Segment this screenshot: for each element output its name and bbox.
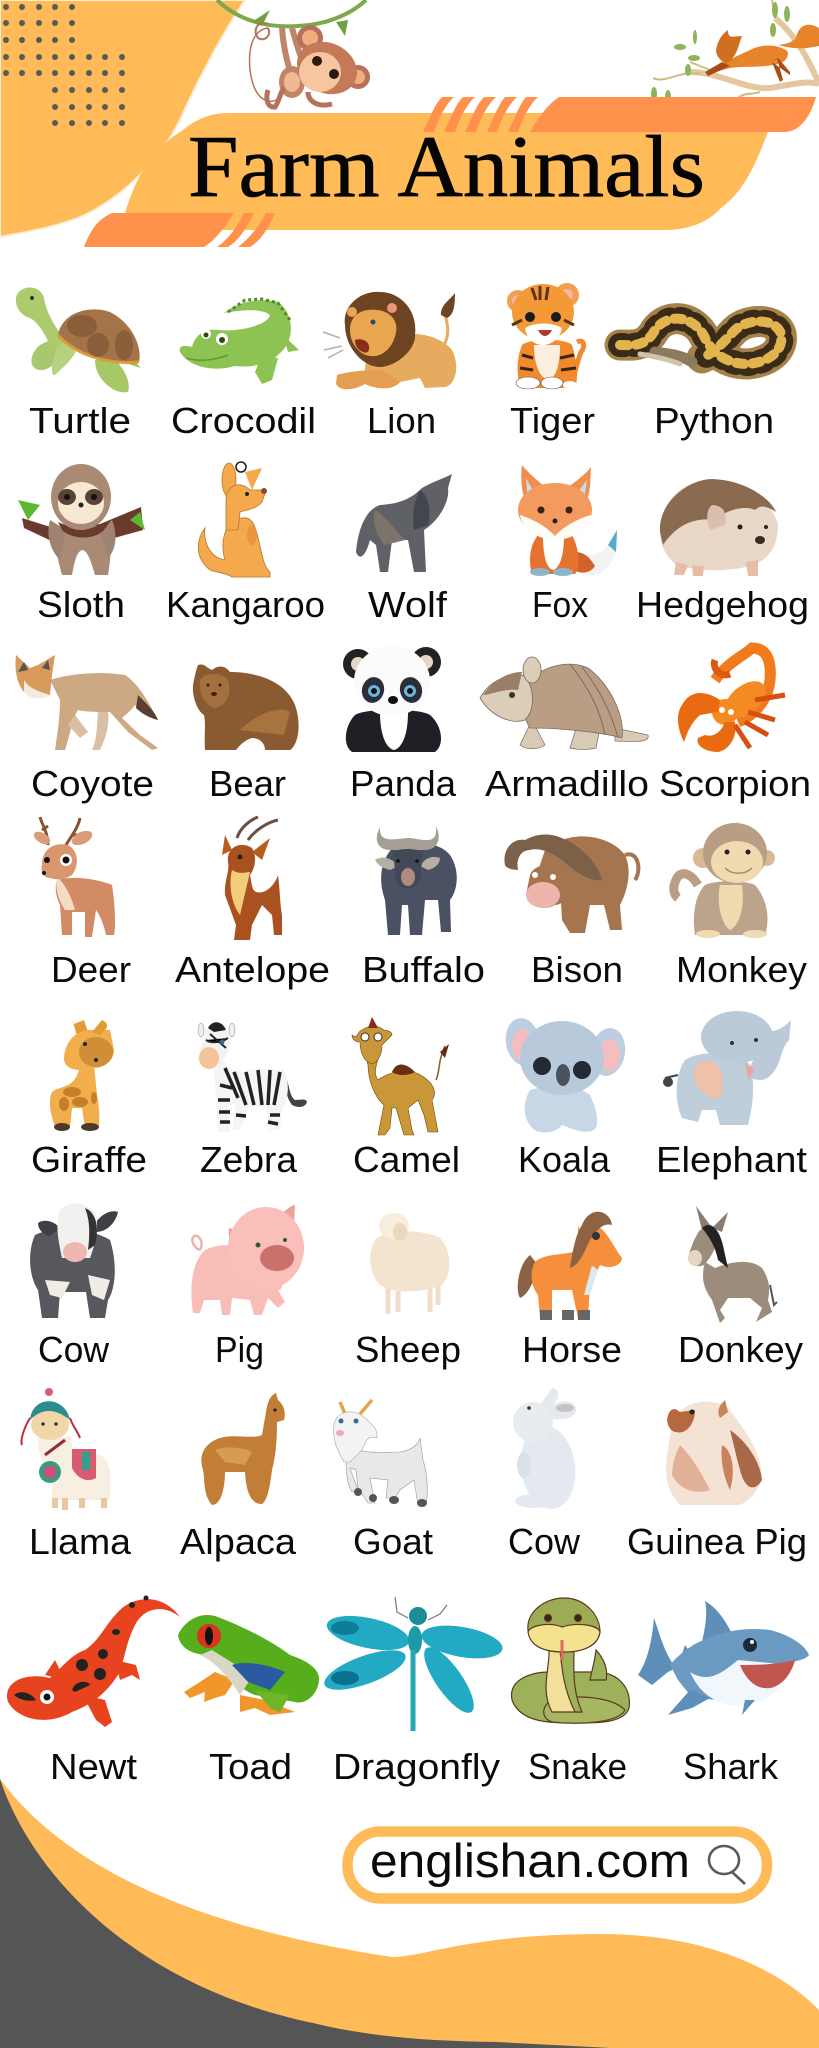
cell: sloth [18, 464, 145, 625]
label: Snake: Snake [528, 1746, 627, 1787]
icon: snake [512, 1598, 629, 1723]
label: Donkey: Donkey [678, 1329, 803, 1370]
label: Armadillo: Armadillo [485, 763, 649, 804]
label: Pig: Pig [215, 1329, 264, 1370]
icon: toad [178, 1615, 319, 1715]
icon: newt [7, 1596, 180, 1727]
cell: crocodile [171, 299, 316, 441]
icon: cow [30, 1203, 118, 1318]
cell: camel [352, 1017, 460, 1180]
label: Zebra: Zebra [200, 1139, 298, 1180]
label: Cow (second): Cow [508, 1521, 581, 1562]
website text: englishan.com [370, 1834, 690, 1887]
cell: antelope [175, 817, 330, 990]
cell: horse [518, 1212, 622, 1370]
cell: python [620, 319, 781, 441]
icon: wolf [356, 474, 452, 572]
icon: lion [323, 292, 456, 389]
label: Sheep: Sheep [355, 1329, 461, 1370]
icon: bison [504, 835, 638, 933]
label: Antelope: Antelope [175, 949, 330, 990]
label: Koala: Koala [518, 1139, 611, 1180]
label: Bear: Bear [209, 763, 286, 804]
cell: sheep [355, 1213, 461, 1370]
cell: fox [518, 465, 618, 625]
cell: alpaca [180, 1393, 297, 1562]
label: Monkey: Monkey [676, 949, 807, 990]
label: Scorpion: Scorpion [659, 763, 811, 804]
label: Buffalo: Buffalo [362, 949, 485, 990]
icon: tiger [507, 283, 584, 389]
label: Alpaca: Alpaca [180, 1521, 297, 1562]
footer wave: dark grey [0, 1779, 611, 2048]
cell: elephant [656, 1011, 807, 1180]
icon: rabbit [513, 1388, 581, 1512]
icon: hedgehog [660, 479, 778, 576]
cell: coyote [15, 655, 158, 804]
cell: guinea pig [627, 1400, 807, 1562]
label: Guinea Pig: Guinea Pig [627, 1521, 807, 1562]
label: Tiger: Tiger [510, 400, 595, 441]
icon: pig [191, 1205, 304, 1315]
cell: wolf [356, 474, 452, 625]
monkey hanging from vine [217, 0, 370, 107]
label: Panda: Panda [350, 763, 457, 804]
label: Fox: Fox [532, 584, 588, 625]
cell: bison [504, 835, 638, 990]
label: Goat: Goat [353, 1521, 433, 1562]
label: Crocodil: Crocodil [171, 400, 316, 441]
label: Lion: Lion [367, 400, 436, 441]
cell: snake [512, 1598, 629, 1787]
label: Hedgehog: Hedgehog [636, 584, 809, 625]
cell: rabbit [508, 1388, 581, 1562]
icon: zebra [198, 1022, 307, 1132]
icon: camel [352, 1017, 449, 1135]
cell: toad [178, 1615, 319, 1787]
label: Shark: Shark [683, 1746, 779, 1787]
icon: alpaca [201, 1393, 285, 1505]
icon: coyote [15, 655, 158, 750]
cell: turtle [16, 287, 141, 441]
icon: deer [32, 817, 115, 937]
cell: scorpion [659, 648, 811, 804]
title banner [84, 97, 816, 247]
cell: bear [193, 664, 299, 804]
icon: sloth [18, 464, 145, 575]
icon: guinea pig [666, 1400, 762, 1505]
icon: donkey [688, 1206, 777, 1323]
icon: crocodile [180, 299, 299, 384]
search bar [348, 1832, 767, 1898]
cell: newt [7, 1596, 180, 1787]
icon: antelope [222, 817, 282, 940]
icon: elephant [663, 1011, 791, 1125]
title: Farm Animals [188, 119, 705, 216]
footer wave: gold [0, 1779, 819, 2048]
cell: monkey [674, 822, 807, 990]
icon: shark [638, 1601, 809, 1715]
label: Cow: Cow [38, 1329, 110, 1370]
label: Deer: Deer [51, 949, 131, 990]
cell: buffalo [362, 826, 485, 990]
label: Camel: Camel [353, 1139, 460, 1180]
label: Python: Python [654, 400, 774, 441]
label: Coyote: Coyote [31, 763, 154, 804]
icon: magnifier [709, 1846, 745, 1884]
icon: giraffe [50, 1018, 114, 1131]
icon: goat [334, 1400, 427, 1507]
icon: armadillo [480, 657, 648, 750]
label: Horse: Horse [522, 1329, 622, 1370]
cell: armadillo [480, 657, 649, 804]
label: Sloth: Sloth [37, 584, 125, 625]
icon: sheep [370, 1213, 449, 1314]
icon: dragonfly [320, 1597, 505, 1731]
label: Dragonfly: Dragonfly [333, 1746, 500, 1787]
icon: llama [21, 1388, 110, 1510]
icon: monkey [674, 822, 775, 938]
cell: goat [334, 1400, 433, 1562]
cell: shark [638, 1601, 809, 1787]
cell: pig [191, 1205, 304, 1370]
icon: scorpion [678, 648, 785, 752]
cell: panda [343, 646, 457, 804]
icon: panda [343, 646, 441, 752]
label: Llama: Llama [29, 1521, 132, 1562]
cell: giraffe [31, 1018, 147, 1180]
icon: kangaroo [198, 462, 270, 577]
cell: dragonfly [320, 1597, 505, 1787]
icon: turtle [16, 287, 141, 392]
icon: bear [193, 664, 299, 750]
label: Turtle: Turtle [29, 400, 131, 441]
label: Giraffe: Giraffe [31, 1139, 147, 1180]
icon: buffalo [375, 826, 457, 935]
cell: cow [30, 1203, 118, 1370]
squirrel on branch [651, 0, 819, 104]
icon: python [620, 319, 781, 364]
icon: fox [518, 465, 618, 576]
icon: horse [518, 1212, 622, 1320]
cell: tiger [507, 283, 595, 441]
top-left corner blob with dots [0, 0, 245, 237]
icon: koala [502, 1015, 629, 1132]
label: Newt: Newt [50, 1746, 137, 1787]
cell: deer [32, 817, 131, 990]
cell: koala [502, 1015, 629, 1180]
label: Elephant: Elephant [656, 1139, 807, 1180]
cell: zebra [198, 1022, 307, 1180]
cell: llama [21, 1388, 132, 1562]
label: Wolf: Wolf [368, 584, 448, 625]
cell: donkey [678, 1206, 803, 1370]
label: Kangaroo: Kangaroo [166, 584, 325, 625]
cell: hedgehog [636, 479, 809, 625]
label: Toad: Toad [209, 1746, 292, 1787]
cell: lion [323, 292, 456, 441]
label: Bison: Bison [531, 949, 623, 990]
cell: kangaroo [166, 462, 325, 625]
